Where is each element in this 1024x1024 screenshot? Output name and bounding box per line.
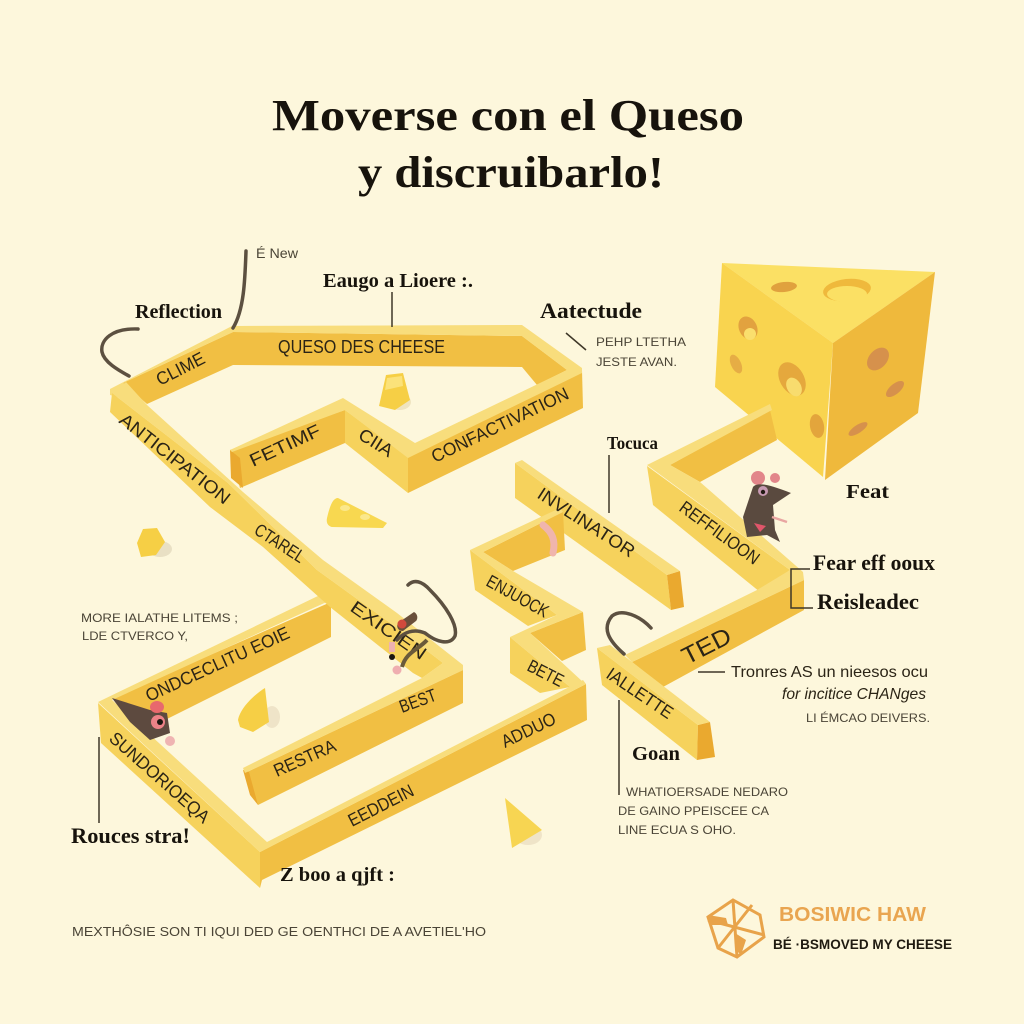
icon: mouse on the right path bbox=[743, 471, 791, 542]
label: Eaugo a Lioere: Eaugo a Lioere :. bbox=[323, 270, 473, 292]
leader line: Tocuca bbox=[608, 455, 610, 513]
wall label: FETIMF: FETIMF bbox=[246, 420, 324, 471]
wall label: CLIME: CLIME bbox=[153, 348, 208, 390]
icon: mouse on diagonal wall bbox=[389, 582, 455, 674]
leader line: Aatectude bbox=[566, 333, 586, 350]
small text: Aatectude note: PEHP LTETHA bbox=[596, 335, 686, 349]
wall label: CONFACTIVATION: CONFACTIVATION bbox=[428, 384, 572, 467]
wall label: RESTRA: RESTRA bbox=[270, 736, 339, 781]
text block: left note: LDE CTVERCO Y, bbox=[82, 629, 188, 643]
wall label: ADDUO: ADDUO bbox=[498, 709, 559, 752]
icon: pink mouse tail bbox=[543, 525, 554, 553]
label: Reisleadec: Reisleadec bbox=[817, 589, 919, 614]
wall: long diagonal with return bbox=[110, 382, 463, 805]
wall label: BETE: BETE bbox=[524, 656, 567, 691]
icon: cheese piece top bbox=[379, 373, 411, 410]
text block: Goan note bbox=[618, 785, 788, 837]
leader line: Eaugo bbox=[391, 292, 393, 327]
footer note: MEXTHÔSIE SON TI IQUI DED GE OENTHCI DE A AVETIEL'HO bbox=[72, 924, 486, 939]
title: y discruibarlo! bbox=[358, 148, 664, 197]
wall: upper left zigzag loop bbox=[110, 325, 583, 493]
wall label: IALLETTE: IALLETTE bbox=[603, 664, 677, 723]
logo title: BOSIWIC HAW bbox=[779, 904, 926, 926]
label: Goan: Goan bbox=[632, 743, 680, 765]
label: Reflection: Reflection bbox=[135, 301, 222, 323]
text block: Goan note: LINE ECUA S OHO. bbox=[618, 823, 736, 837]
label: Rouces stra: Rouces stra! bbox=[71, 823, 190, 848]
icon: mouse in lower left corner bbox=[112, 698, 175, 746]
wall label: CIIA: CIIA bbox=[355, 424, 397, 461]
wall label: SUNDORIOEQA: SUNDORIOEQA bbox=[105, 728, 214, 827]
leader line: Tronres bbox=[698, 671, 725, 673]
icon: cheese piece bottom bbox=[505, 798, 542, 848]
wall label: ENJUOCK: ENJUOCK bbox=[483, 571, 552, 621]
wall: right path to the cheese bbox=[597, 404, 804, 760]
label: Feat: Feat bbox=[846, 481, 889, 503]
icon: cheese wheel logo bbox=[708, 900, 764, 957]
label: Tocuca: Tocuca bbox=[607, 433, 658, 453]
decorative curved tail: right wall bbox=[607, 613, 651, 654]
text block: Goan note: WHATIOERSADE NEDARO bbox=[626, 785, 788, 799]
icon: cheese piece lower bbox=[238, 688, 280, 732]
text block: Tronres bbox=[731, 664, 930, 725]
wall label: BEST: BEST bbox=[397, 685, 439, 717]
wall label: INVLINATOR: INVLINATOR bbox=[534, 484, 639, 561]
label: Fear eff ooux: Fear eff ooux bbox=[813, 550, 935, 575]
wall label: TED glyphs: TED bbox=[677, 623, 736, 670]
text block: Tronres: LI ÉMCAO DEIVERS. bbox=[806, 710, 930, 725]
wall label: ONDCECLITU EOIE: ONDCECLITU EOIE bbox=[142, 623, 293, 706]
wall label: EEDDEIN: EEDDEIN bbox=[345, 781, 417, 831]
leader line: Rouces bbox=[98, 737, 100, 823]
icon: cheese piece left bbox=[137, 528, 172, 557]
title bbox=[272, 91, 744, 197]
text block: Tronres: for incitice CHANges bbox=[782, 686, 926, 703]
small text: Aatectude note bbox=[596, 335, 686, 369]
text block: Tronres: Tronres AS un nieesos ocu bbox=[731, 664, 928, 681]
decorative curved tail: new bbox=[233, 251, 246, 328]
decorative curved tail: reflection bbox=[102, 329, 138, 376]
wall: centre zigzag bbox=[470, 460, 684, 693]
text block: Goan note: DE GAINO PPEISCEE CA bbox=[618, 804, 769, 818]
icon: big cheese wedge bbox=[715, 263, 935, 480]
logo subtitle: BÉ ·BSMOVED MY CHEESE bbox=[773, 936, 952, 952]
wall: lower left loop bbox=[98, 595, 587, 888]
wall label: CTAREL: CTAREL bbox=[251, 520, 309, 567]
label: Z boo a qjft: Z boo a qjft : bbox=[280, 864, 395, 886]
wall label: QUESO DES CHEESE: QUESO DES CHEESE bbox=[278, 337, 445, 357]
bracket leader bbox=[791, 569, 813, 608]
wall label: ANTICIPATION: ANTICIPATION bbox=[116, 409, 234, 508]
label: Aatectude: Aatectude bbox=[540, 298, 642, 323]
text block: left note: MORE IALATHE LITEMS ; bbox=[81, 611, 238, 625]
wall label: REFFILIOON: REFFILIOON bbox=[676, 497, 763, 568]
leader line: Goan bbox=[618, 700, 620, 795]
text block: left note bbox=[81, 611, 238, 643]
small text: Aatectude note: JESTE AVAN. bbox=[596, 355, 677, 369]
label: É New: É New bbox=[256, 246, 298, 261]
title: Moverse con el Queso bbox=[272, 91, 744, 140]
wall label: EXICIEN: EXICIEN bbox=[347, 597, 430, 664]
icon: cheese piece centre bbox=[327, 498, 387, 528]
